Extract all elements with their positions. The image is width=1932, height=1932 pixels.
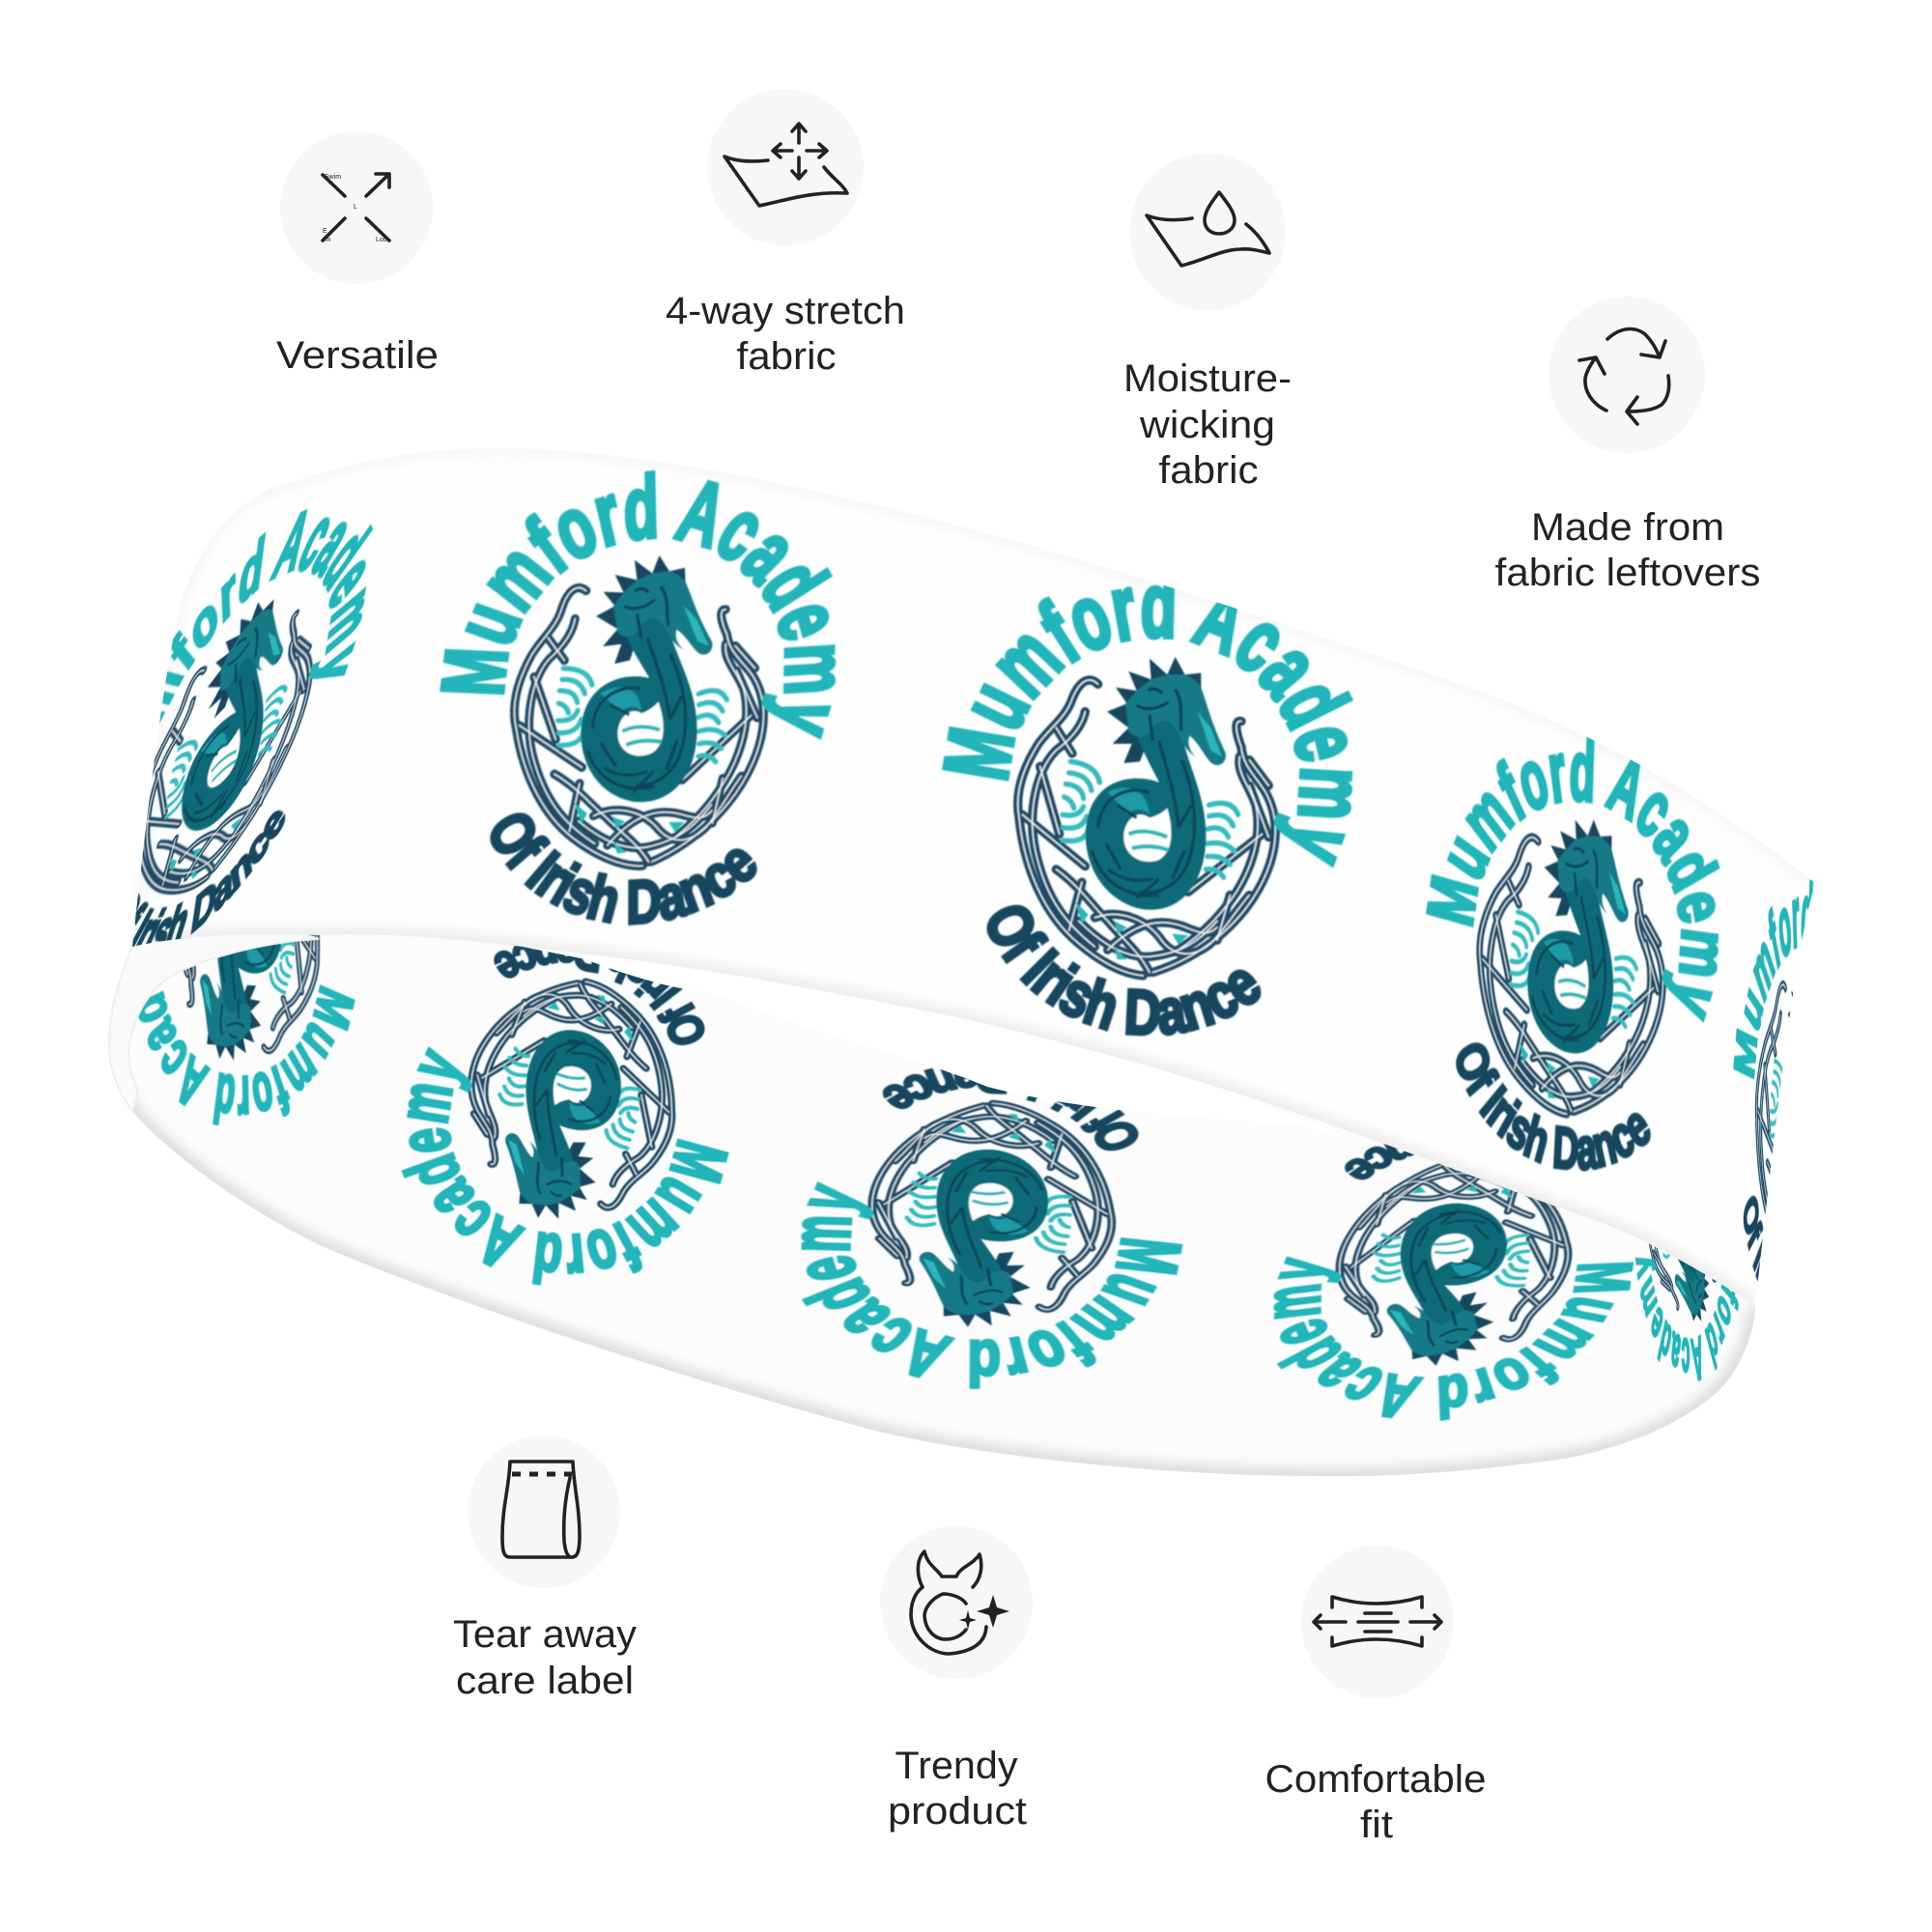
icon: four diagonal arrows: E bbox=[323, 228, 327, 235]
icon: care label bbox=[502, 1462, 580, 1557]
hole between band sides bbox=[541, 942, 1352, 1140]
front logo C: Of Irish Dance bbox=[985, 904, 1262, 1037]
front logo E (right edge) bbox=[1733, 879, 1814, 1283]
label: Trendy bbox=[895, 1745, 1018, 1787]
inner logo 1: Of Irish Dance bbox=[185, 757, 363, 906]
inner logo 2: Of Irish Dance bbox=[493, 946, 705, 1046]
icon: four diagonal arrows bbox=[323, 174, 389, 243]
icon: four diagonal arrows: Swim bbox=[325, 174, 341, 181]
icon: headband with ears and sparkles bbox=[911, 1551, 1009, 1654]
icon: recycling arrows bbox=[1579, 329, 1669, 424]
feature: trendy product bbox=[880, 1526, 1033, 1833]
icon: fabric with water drop bbox=[1147, 192, 1269, 266]
label: care label bbox=[456, 1660, 634, 1702]
icon circle bbox=[1129, 154, 1286, 310]
front logo C: Mumford Academy bbox=[941, 583, 1354, 869]
front logo D: Of Irish Dance bbox=[1455, 1041, 1652, 1173]
icon circle bbox=[707, 89, 864, 245]
label bbox=[1123, 357, 1292, 492]
front logo A (left, foreshortened) bbox=[132, 508, 374, 947]
inner logo 3 bbox=[800, 1067, 1184, 1390]
label bbox=[1265, 1758, 1486, 1846]
inner logo 3: Mumford Academy bbox=[800, 1180, 1184, 1390]
label bbox=[1495, 506, 1760, 594]
icon: fabric with four arrows bbox=[724, 124, 847, 206]
icon circle bbox=[1301, 1546, 1454, 1698]
front logo B bbox=[439, 469, 837, 927]
front logo A (left, foreshortened): Mumford Academy bbox=[159, 508, 374, 724]
feature: tear away care label bbox=[453, 1435, 637, 1702]
label: Versatile bbox=[276, 334, 439, 377]
feature: moisture-wicking fabric bbox=[1123, 154, 1292, 492]
label: Tear away bbox=[453, 1613, 637, 1656]
inner logo 4: Of Irish Dance bbox=[1344, 1144, 1416, 1180]
front logo D bbox=[1425, 736, 1721, 1173]
label: product bbox=[888, 1790, 1027, 1833]
icon circle bbox=[468, 1435, 620, 1588]
icon: four diagonal arrows: L bbox=[354, 204, 357, 211]
feature: versatile bbox=[276, 131, 439, 377]
label: 4-way stretch bbox=[666, 290, 905, 332]
front logo E (right edge): Mumford Academy bbox=[1733, 879, 1814, 1081]
label: fabric leftovers bbox=[1495, 552, 1760, 594]
label bbox=[453, 1613, 637, 1702]
inner logo 5: Mumford Academy bbox=[1634, 1256, 1739, 1382]
icon: four diagonal arrows: Lou bbox=[376, 237, 387, 243]
icon: fabric stretching horizontally bbox=[1314, 1597, 1441, 1646]
inner logo 5 bbox=[1634, 1243, 1739, 1382]
label: wicking bbox=[1139, 404, 1275, 446]
inner logo 1 bbox=[138, 935, 355, 1126]
front logo B: Of Irish Dance bbox=[489, 811, 758, 927]
inner logo 5: Of Irish Dance bbox=[1620, 1031, 1708, 1223]
feature: 4-way stretch fabric bbox=[666, 89, 905, 378]
feature: made from fabric leftovers bbox=[1495, 297, 1760, 594]
front band lower and upper edge shading bbox=[132, 469, 1814, 1305]
icon: four diagonal arrows: im bbox=[324, 237, 331, 243]
label: Moisture- bbox=[1123, 357, 1292, 400]
label: fit bbox=[1360, 1804, 1393, 1846]
front logo E (right edge): Of Irish Dance bbox=[1743, 1194, 1764, 1283]
label bbox=[888, 1745, 1027, 1833]
icon circle bbox=[880, 1526, 1033, 1679]
inner logo 4: Mumford Academy bbox=[1272, 1256, 1634, 1422]
feature: comfortable fit bbox=[1265, 1546, 1486, 1846]
label: Comfortable bbox=[1265, 1758, 1486, 1801]
icon circle bbox=[280, 131, 433, 284]
label: fabric bbox=[1159, 449, 1258, 492]
left rolled lip bbox=[109, 931, 319, 1111]
inner logo 4 bbox=[1272, 1144, 1634, 1422]
front logo A (left, foreshortened): Of Irish Dance bbox=[132, 810, 286, 947]
inner logos bbox=[135, 711, 1804, 1497]
inner logo 2: Mumford Academy bbox=[400, 1045, 730, 1287]
front logo D: Mumford Academy bbox=[1425, 736, 1721, 1024]
inner logo 3: Of Irish Dance bbox=[881, 1067, 1140, 1151]
icon circle bbox=[1548, 297, 1705, 453]
inner logo 2 bbox=[400, 946, 730, 1287]
inner band surface bbox=[109, 869, 1755, 1476]
sparkles bbox=[977, 1595, 1009, 1628]
headband bbox=[108, 469, 1814, 1476]
front band bbox=[132, 448, 1815, 1306]
label: Made from bbox=[1531, 506, 1724, 549]
label: fabric bbox=[736, 335, 837, 378]
label bbox=[666, 290, 905, 378]
outer lower edge shading bbox=[133, 1097, 1755, 1476]
inner logo 1: Mumford Academy bbox=[138, 983, 355, 1126]
front logo C bbox=[941, 583, 1354, 1037]
front logo B: Mumford Academy bbox=[439, 469, 837, 741]
